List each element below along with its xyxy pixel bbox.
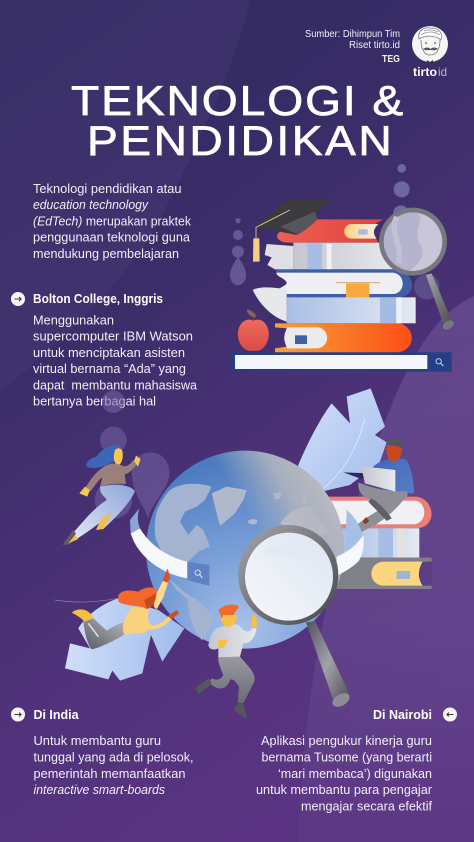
text: Bolton College: Menggunakan — [33, 312, 114, 328]
illustration: globe with people, books and magnifier — [55, 388, 432, 719]
search ring: right band — [337, 510, 364, 576]
text: Bolton College: supercomputer IBM Watson — [33, 328, 193, 344]
text: Di India — [34, 733, 194, 797]
text: Bolton College: untuk menciptakan asisten — [33, 345, 185, 360]
leaf: upper right — [298, 388, 387, 492]
source credit: Sumber: Dihimpun Tim — [305, 29, 400, 40]
apple — [238, 309, 269, 351]
background: lighter curved shape at right — [298, 296, 474, 842]
book: blue — [340, 528, 419, 558]
icon: arrow bullet Nairobi — [443, 708, 457, 722]
intro text — [33, 181, 191, 261]
intro text: (EdTech) merupakan praktek — [33, 214, 191, 228]
text: Di Nairobi: mengajar secara efektif — [301, 798, 432, 814]
decorative bubbles left — [230, 218, 246, 285]
intro text: mendukung pembelajaran — [33, 246, 179, 261]
continents — [155, 484, 330, 640]
tirto.id logo — [412, 26, 448, 79]
icon: arrow bullet Bolton — [11, 292, 25, 306]
text: Di India: pemerintah memanfaatkan — [34, 766, 186, 781]
text: Di Nairobi: Aplikasi pengukur kinerja guru — [261, 733, 432, 748]
source credit: TEG — [382, 54, 400, 65]
globe — [146, 451, 344, 649]
person: man with laptop on books — [343, 438, 414, 534]
title — [71, 78, 403, 165]
book: pink cover — [328, 497, 432, 528]
source credit: Riset tirto.id — [349, 40, 400, 51]
tirto.id logo: tirto — [413, 65, 437, 79]
illustration: book stack with cap, apple, magnifier and search bar — [230, 164, 456, 372]
text: Di Nairobi: bernama Tusome (yang berarti — [262, 750, 432, 764]
text: Bolton College — [33, 312, 198, 408]
leaf vein: upper right — [322, 418, 365, 490]
book: blue grey with torn white pages — [265, 243, 396, 269]
text: Di Nairobi — [256, 733, 433, 814]
magnifier over globe — [238, 525, 352, 710]
person: woman with orange hair — [72, 568, 179, 649]
title: PENDIDIKAN — [87, 118, 392, 165]
search bar — [232, 352, 452, 372]
background: lighter diagonal at upper left — [0, 0, 250, 393]
heading: Di Nairobi: Di Nairobi — [373, 707, 432, 722]
intro text: penggunaan teknologi guna — [33, 230, 191, 244]
book: orange — [275, 323, 412, 352]
book: light blue — [253, 287, 416, 323]
text: Di Nairobi: ‘mari membaca’) digunakan — [278, 766, 432, 781]
search ring: search button — [187, 562, 209, 586]
person: man with orange hair — [195, 604, 257, 719]
book: white with blue cover — [275, 269, 412, 304]
decorative bubbles right — [393, 164, 439, 299]
icon: arrow bullet India — [11, 708, 25, 722]
person: woman with blue hair — [63, 445, 141, 545]
title: TEKNOLOGI & — [71, 78, 403, 125]
heading: Di India: Di India — [34, 707, 79, 722]
tirto.id logo: id — [438, 65, 447, 79]
search ring: left band — [130, 508, 187, 578]
text: Di Nairobi: untuk membantu para pengajar — [256, 782, 433, 797]
graduation cap — [253, 200, 330, 262]
decorative bubbles — [95, 390, 169, 519]
leaf: lower left — [55, 598, 184, 681]
text: Bolton College: bertanya berbagai hal — [33, 394, 156, 408]
text: Bolton College: dapat membantu mahasiswa — [33, 378, 198, 392]
text: Di India: Untuk membantu guru — [34, 733, 161, 748]
text: Di India: interactive smart-boards — [34, 782, 165, 797]
intro text: education technology — [33, 197, 149, 212]
book: grey — [337, 558, 432, 589]
source credit — [305, 29, 400, 65]
heading: Bolton College: Bolton College, Inggris — [33, 291, 163, 306]
text: Di India: tunggal yang ada di pelosok, — [34, 750, 194, 764]
book: red — [277, 219, 383, 243]
magnifying glass — [379, 208, 456, 332]
intro text: Teknologi pendidikan atau — [33, 181, 182, 196]
text: Bolton College: virtual bernama “Ada” yang — [33, 361, 186, 376]
